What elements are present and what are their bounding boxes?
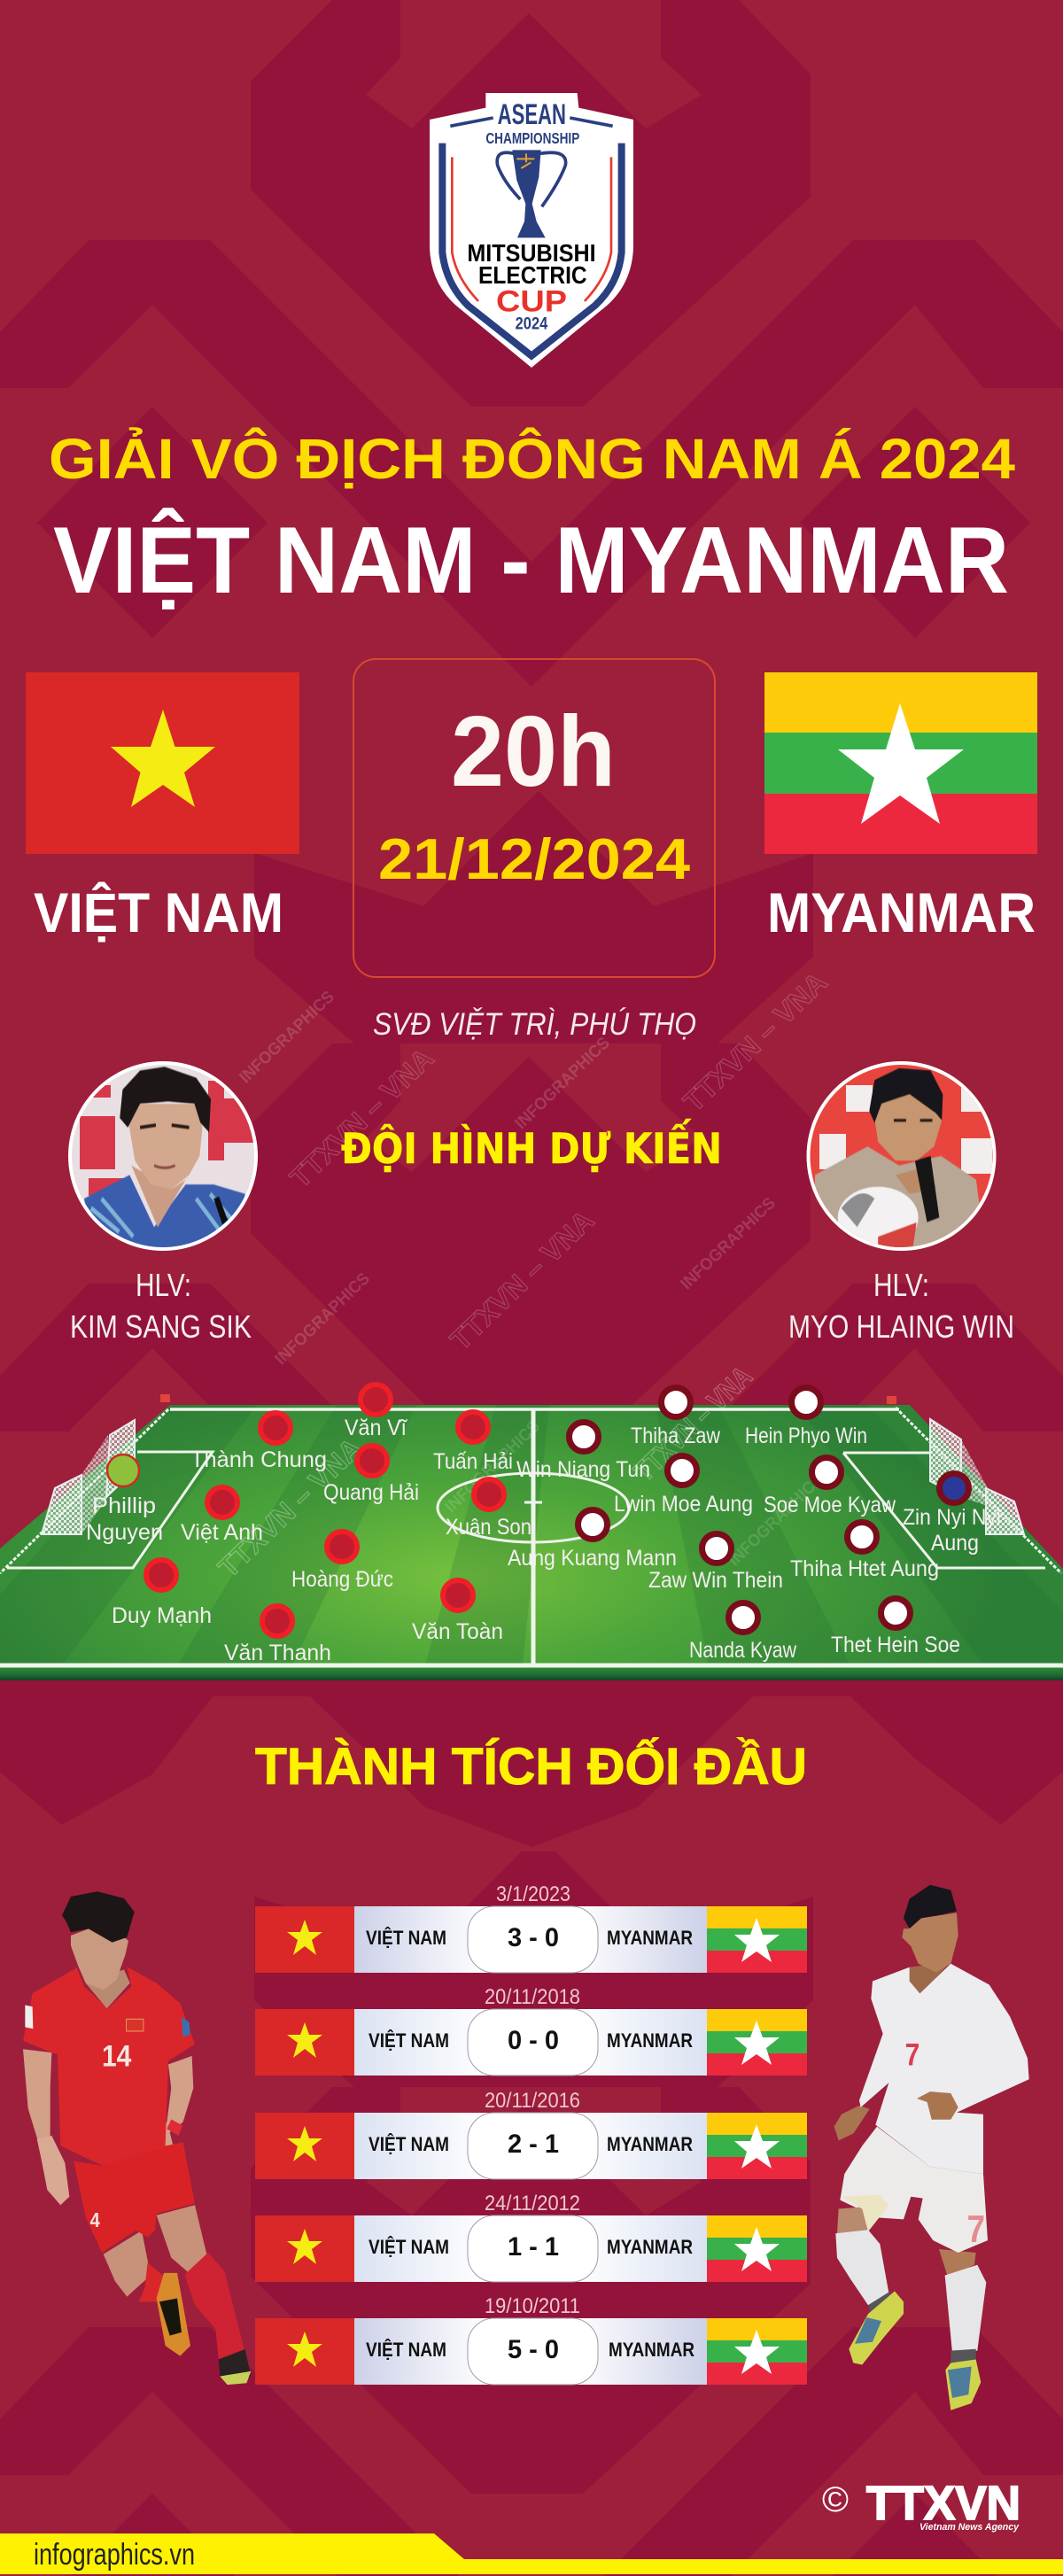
watermarks: INFOGRAPHICS [678,1194,780,1293]
coach caption: Kim Sang Sik [70,1267,252,1345]
goal left [42,1394,170,1534]
tournament logo: 2024 [516,315,548,334]
match row 2016: 2 - 1 [508,2130,559,2159]
TTXVN logo: Vietnam News Agency [919,2522,1020,2533]
player Hoàng Đức: Hoàng Đức [291,1567,393,1592]
match row 2018: VIỆT NAM [369,2029,449,2052]
player Hein Phyo Win: Hein Phyo Win [745,1424,867,1448]
coach caption: Myo Hlaing Win: HLV: [873,1267,929,1303]
match row 2011: VIỆT NAM [366,2339,446,2361]
match row 2012: 24/11/2012 [485,2192,580,2215]
goalkeeper: Nguyen [86,1520,163,1545]
player Văn Thanh: Văn Thanh [224,1641,331,1665]
TTXVN logo: © [822,2480,849,2519]
player Win Niang Tun [516,1423,650,1482]
match row 2012: VIỆT NAM [369,2236,449,2258]
tournament logo: ASEAN [498,98,566,130]
player photo: Vietnam: 14 [102,2038,131,2073]
match row 2018: 0 - 0 [508,2026,559,2055]
watermarks: TTXVN – VNA [677,966,833,1118]
TTXVN logo: TTXVN [866,2477,1020,2530]
match time panel [353,659,715,977]
goalkeeper: Phillip [92,1494,156,1518]
player Thiha Htet Aung [790,1522,939,1581]
match row 2016: MYANMAR [607,2133,693,2155]
player Việt Anh [181,1487,263,1545]
coach caption: Kim Sang Sik: KIM SANG SIK [70,1308,252,1345]
player Thiha Zaw [631,1387,721,1448]
player Duy Mạnh [112,1560,212,1628]
match row 2016: VIỆT NAM [369,2133,449,2155]
goal right [887,1396,1024,1534]
watermarks: INFOGRAPHICS [237,988,338,1087]
football pitch: TTXVN – VNA [212,1432,368,1584]
player photo: Vietnam: 4 [90,2209,100,2232]
coach caption: Myo Hlaing Win: MYO HLAING WIN [788,1308,1014,1345]
watermarks: INFOGRAPHICS [512,1034,614,1133]
player Quang Hải: Quang Hải [323,1480,419,1505]
tournament logo: ELECTRIC [478,261,587,289]
match row 2011: 19/10/2011 [485,2294,580,2318]
match time panel: 20h [451,695,616,807]
player Xuân Son [446,1479,532,1540]
football pitch: INFOGRAPHICS [442,1417,544,1517]
tournament logo: MITSUBISHI [467,239,596,267]
goalkeeper [86,1455,163,1545]
goalkeeper Zin Nyi Nyi Aung [903,1474,1001,1556]
player Win Niang Tun: Win Niang Tun [516,1457,650,1482]
player Văn Thanh [224,1606,331,1665]
player photo: Myanmar: 7 [967,2207,985,2251]
coach caption: Myo Hlaing Win [788,1267,1014,1345]
heading: match: VIỆT NAM - MYANMAR [53,507,1009,613]
player Thành Chung [190,1413,327,1472]
player Tuấn Hải: Tuấn Hải [433,1449,513,1474]
heading: expected lineup: ĐỘI HÌNH DỰ KIẾN [341,1120,722,1174]
flag: Myanmar [764,672,1037,854]
tournament logo: CHAMPIONSHIP [485,129,579,147]
player Lwin Moe Aung [614,1456,753,1517]
match row 2018: 20/11/2018 [485,1985,580,2009]
footer band [0,2533,1063,2574]
match row 2016 [255,2089,807,2179]
match row 2012: MYANMAR [607,2236,693,2258]
player Văn Vĩ: Văn Vĩ [345,1416,407,1440]
watermarks [237,966,833,1369]
Myanmar players [508,1387,1001,1663]
match row 2023: 3/1/2023 [496,1882,570,1906]
watermarks: TTXVN – VNA [283,1042,439,1194]
player Nanda Kyaw: Nanda Kyaw [689,1638,797,1663]
match row 2023: MYANMAR [607,1927,693,1949]
player Thet Hein Soe [831,1598,960,1657]
player Aung Kuang Mann: Aung Kuang Mann [508,1546,677,1571]
player Zaw Win Thein [648,1534,783,1593]
match row 2012: 1 - 1 [508,2232,559,2262]
watermarks: TTXVN – VNA [444,1204,600,1356]
player photo: Myanmar: 7 [905,2037,919,2072]
match row 2023: 3 - 0 [508,1923,559,1952]
player Thiha Htet Aung: Thiha Htet Aung [790,1556,939,1581]
player Duy Mạnh: Duy Mạnh [112,1603,212,1628]
player Văn Toàn: Văn Toàn [412,1619,503,1644]
tournament logo [430,93,633,368]
heading: head-to-head: THÀNH TÍCH ĐỐI ĐẦU [255,1738,807,1796]
match row 2011 [255,2294,807,2385]
player Lwin Moe Aung: Lwin Moe Aung [614,1492,753,1517]
football pitch: TTXVN – VNA [628,1360,758,1487]
venue: SVĐ VIỆT TRÌ, PHÚ THỌ [373,1007,696,1042]
player Soe Moe Kyaw [764,1458,896,1517]
player Soe Moe Kyaw: Soe Moe Kyaw [764,1493,896,1517]
player Việt Anh: Việt Anh [181,1520,263,1545]
match time panel: 21/12/2024 [378,826,690,891]
player Zaw Win Thein: Zaw Win Thein [648,1568,783,1593]
player photo: Myanmar [834,1885,1029,2410]
player Quang Hải [323,1446,419,1505]
goalkeeper Zin Nyi Nyi Aung: Aung [931,1531,979,1556]
player photo: Vietnam [23,1891,251,2385]
match row 2012 [255,2192,807,2282]
watermarks: INFOGRAPHICS [272,1269,374,1369]
football pitch [0,1360,1063,1680]
match row 2011: MYANMAR [609,2339,694,2361]
footer band: infographics.vn [34,2538,195,2572]
heading: tournament: GIẢI VÔ ĐỊCH ĐÔNG NAM Á 2024 [49,426,1015,491]
match row 2023 [255,1882,807,1973]
player Thành Chung: Thành Chung [190,1447,327,1472]
player Hein Phyo Win [745,1387,867,1448]
match row 2011: 5 - 0 [508,2335,559,2364]
flag: Vietnam [26,672,299,854]
player Nanda Kyaw [689,1603,797,1663]
team name: Myanmar: MYANMAR [767,882,1036,944]
player Aung Kuang Mann [508,1509,677,1571]
player Xuân Son: Xuân Son [446,1515,532,1540]
match row 2018: MYANMAR [607,2029,693,2052]
Vietnam players [86,1385,532,1665]
player Văn Vĩ [345,1385,407,1440]
football pitch: INFOGRAPHICS [725,1470,827,1570]
team name: Việt Nam: VIỆT NAM [34,881,283,944]
player Tuấn Hải [433,1412,513,1474]
coach photo: Kim Sang Sik [68,1061,258,1261]
match row 2016: 20/11/2016 [485,2089,580,2113]
match row 2018 [255,1985,807,2076]
coach photo: Myo Hlaing Win [806,1061,997,1261]
coach caption: Kim Sang Sik: HLV: [136,1267,191,1303]
player Văn Toàn [412,1580,503,1644]
player Thet Hein Soe: Thet Hein Soe [831,1633,960,1657]
player Thiha Zaw: Thiha Zaw [631,1424,721,1448]
tournament logo: CUP [496,285,567,319]
player Hoàng Đức [291,1532,393,1592]
match row 2023: VIỆT NAM [366,1927,446,1949]
goalkeeper Zin Nyi Nyi Aung: Zin Nyi Nyi [903,1505,1001,1530]
